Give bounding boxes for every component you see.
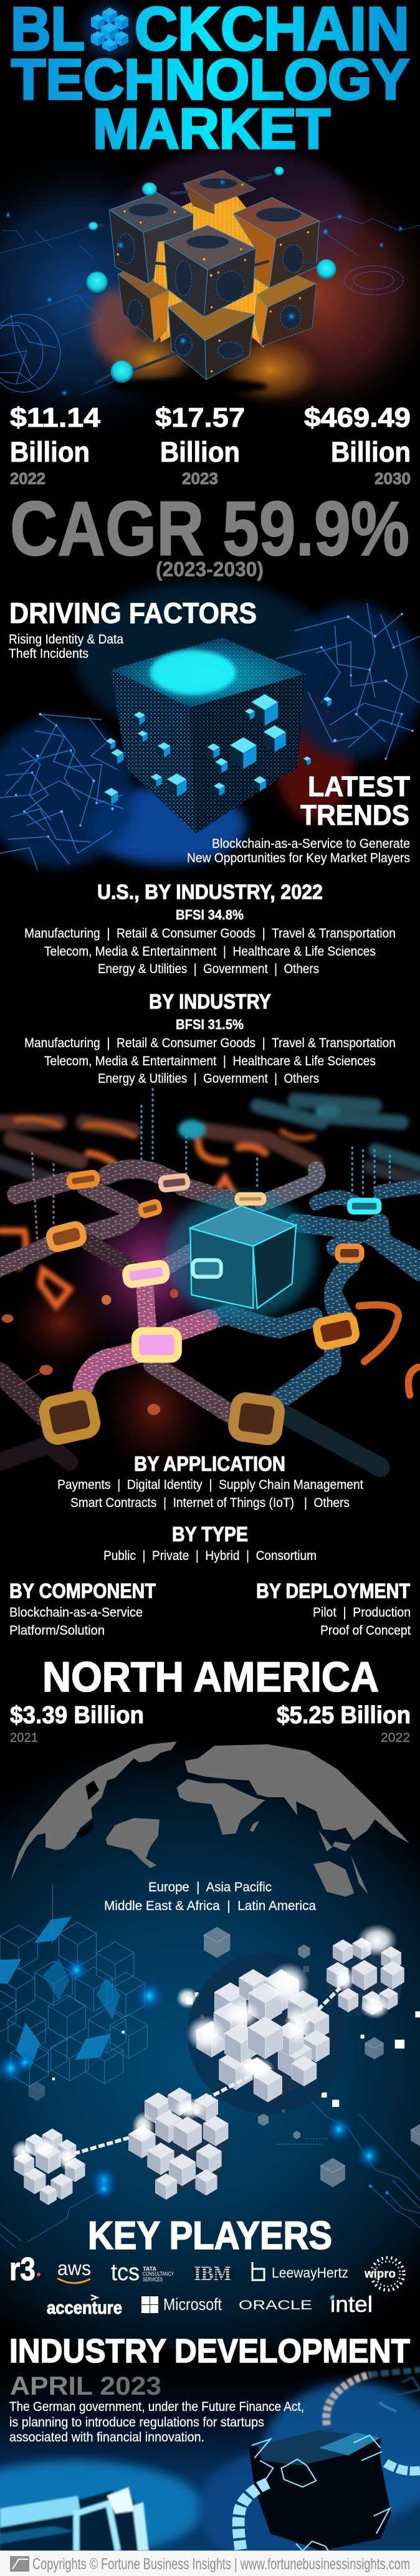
- logo: tcs: SERVICES: [143, 2276, 163, 2283]
- by deployment: Proof of Concept: [320, 1623, 411, 1638]
- dark cube: [249, 2430, 391, 2551]
- by deployment: [256, 1579, 411, 1638]
- logo: IBM: IBM: [194, 2263, 231, 2285]
- logo: LeewayHertz: LeewayHertz: [272, 2265, 348, 2281]
- lower right cube: [254, 274, 316, 346]
- by deployment: Pilot | Production: [313, 1605, 411, 1620]
- stat: 2022 market size: Billion: [10, 436, 90, 468]
- right cube: [233, 197, 319, 288]
- logo: tcs: TATA: [143, 2266, 156, 2272]
- key players heading: KEY PLAYERS: [88, 2214, 332, 2258]
- logo: aws: aws: [57, 2257, 91, 2279]
- North America: 2021: [10, 1730, 38, 1745]
- latest trends: [187, 771, 410, 865]
- U.S., by industry: [24, 880, 396, 976]
- by component: Platform/Solution: [9, 1623, 105, 1638]
- artwork: data cube with circuit lines: [0, 581, 420, 870]
- stat: 2023 market size: Billion: [160, 436, 240, 468]
- North America: $3.39 Billion: [10, 1702, 144, 1729]
- large dotted cube: [104, 638, 332, 834]
- industry development: [9, 2332, 410, 2445]
- stat: 2022 market size: [10, 402, 101, 488]
- stat: 2022 market size: 2022: [10, 469, 45, 488]
- U.S., by industry: BFSI 34.8%: [176, 907, 244, 923]
- title: [11, 0, 409, 161]
- industry development: APRIL 2023: [10, 2371, 161, 2400]
- by type: Public | Private | Hybrid | Consortium: [103, 1549, 317, 1563]
- stat: 2030 market size: 2030: [375, 469, 411, 488]
- driving factors: Theft Incidents: [9, 647, 88, 661]
- U.S., by industry: Telecom, Media & Entertainment | Healthcare & Life Sciences: [44, 944, 376, 959]
- industry development: The German government, under the Future Finance Act,: [9, 2400, 304, 2414]
- title glow: hex block letter O: [71, 0, 148, 69]
- center cube: [164, 226, 256, 317]
- North America: [10, 1653, 411, 1745]
- artwork: wireframe hexagon blocks: [0, 1884, 420, 2200]
- left cube: [109, 192, 193, 284]
- logo: tcs: CONSULTANCY: [143, 2271, 174, 2277]
- footer logo: [10, 2556, 29, 2572]
- stat: 2030 market size: [304, 402, 411, 488]
- logo: r3: r3: [9, 2251, 36, 2288]
- by component: BY COMPONENT: [9, 1579, 156, 1602]
- CAGR: (2023-2030): [156, 558, 264, 581]
- stat: 2023 market size: $17.57: [155, 402, 245, 433]
- by industry: Energy & Utilities | Government | Others: [98, 1072, 319, 1086]
- logo: wipro: wipro: [364, 2268, 396, 2281]
- U.S., by industry: Manufacturing | Retail & Consumer Goods | Travel & Transportation: [24, 926, 396, 941]
- footer: [0, 2550, 420, 2576]
- other regions: Middle East & Africa | Latin America: [104, 1899, 316, 1913]
- U.S., by industry: Energy & Utilities | Government | Others: [98, 962, 319, 976]
- industry development: is planning to introduce regulations for startups: [9, 2415, 264, 2430]
- back cube: [183, 170, 256, 214]
- U.S., by industry: U.S., BY INDUSTRY, 2022: [97, 880, 323, 903]
- by component: Blockchain-as-a-Service: [9, 1605, 143, 1620]
- world map: [11, 1742, 409, 1897]
- latest trends: Blockchain-as-a-Service to Generate: [212, 837, 410, 851]
- stat: 2030 market size: Billion: [331, 436, 411, 468]
- logo: accenture: accenture: [47, 2298, 122, 2318]
- other regions: Europe | Asia Pacific: [148, 1880, 272, 1894]
- bottom cube: [168, 300, 254, 379]
- artwork: glowing cube cluster: [0, 148, 420, 442]
- logo: intel: intel: [330, 2291, 373, 2317]
- background: North America to key players navy glow: [0, 1738, 420, 2349]
- logo: tcs: tcs: [111, 2260, 140, 2286]
- by industry: BY INDUSTRY: [149, 990, 271, 1013]
- artwork: glowing chain network: [0, 1089, 420, 1481]
- lower left cube: [118, 269, 169, 342]
- North America: 2022: [381, 1730, 410, 1745]
- logo: ORACLE: ORACLE: [239, 2298, 312, 2312]
- by type: BY TYPE: [172, 1523, 248, 1546]
- cluster: top right: [327, 1924, 404, 2019]
- latest trends: LATEST: [308, 771, 410, 802]
- North America: $5.25 Billion: [277, 1702, 411, 1729]
- logo: wipro: [364, 2258, 404, 2290]
- cyan block: [166, 1192, 316, 1320]
- other regions: [104, 1880, 316, 1913]
- logo: LeewayHertz: [252, 2262, 348, 2281]
- stat: 2023 market size: 2023: [182, 469, 218, 488]
- stat: 2023 market size: [155, 402, 245, 488]
- by application: Payments | Digital Identity | Supply Chain Management: [57, 1478, 363, 1492]
- cluster: bottom left: [11, 2129, 85, 2205]
- by type: [103, 1523, 317, 1563]
- artwork: bottom circuit traces: [0, 2177, 420, 2248]
- lower and right chain: [239, 2463, 420, 2551]
- by component: [9, 1579, 156, 1638]
- driving factors: Rising Identity & Data: [9, 632, 123, 647]
- driving factors: DRIVING FACTORS: [9, 597, 257, 629]
- by application: Smart Contracts | Internet of Things (IoT) | Others: [70, 1496, 350, 1510]
- latest trends: TRENDS: [300, 799, 409, 831]
- by industry: BFSI 31.5%: [176, 1017, 244, 1032]
- stat: 2030 market size: $469.49: [304, 402, 411, 433]
- upper chain: [327, 2370, 420, 2425]
- artwork: neon chained cube: [0, 2365, 420, 2564]
- cluster: large: [186, 1962, 332, 2102]
- by industry: Manufacturing | Retail & Consumer Goods | Travel & Transportation: [24, 1036, 396, 1050]
- cluster: middle bottom: [128, 2088, 231, 2200]
- title: MARKET: [93, 98, 330, 161]
- artwork: white cube blockchain clusters: [11, 1924, 404, 2205]
- industry development: associated with financial innovation.: [9, 2430, 204, 2445]
- by industry: Telecom, Media & Entertainment | Healthcare & Life Sciences: [44, 1054, 376, 1068]
- logo: Microsoft: Microsoft: [163, 2295, 222, 2314]
- title: TECHNOLOGY: [11, 48, 409, 112]
- by application: BY APPLICATION: [134, 1452, 285, 1475]
- by industry: [24, 990, 396, 1086]
- by application: [57, 1452, 363, 1510]
- stat: 2022 market size: $11.14: [10, 402, 101, 433]
- logo: Microsoft: [141, 2295, 222, 2314]
- blurred left block: [0, 2487, 150, 2551]
- driving factors: [9, 597, 257, 661]
- North America: NORTH AMERICA: [42, 1653, 379, 1701]
- logo: tcs: [111, 2260, 174, 2286]
